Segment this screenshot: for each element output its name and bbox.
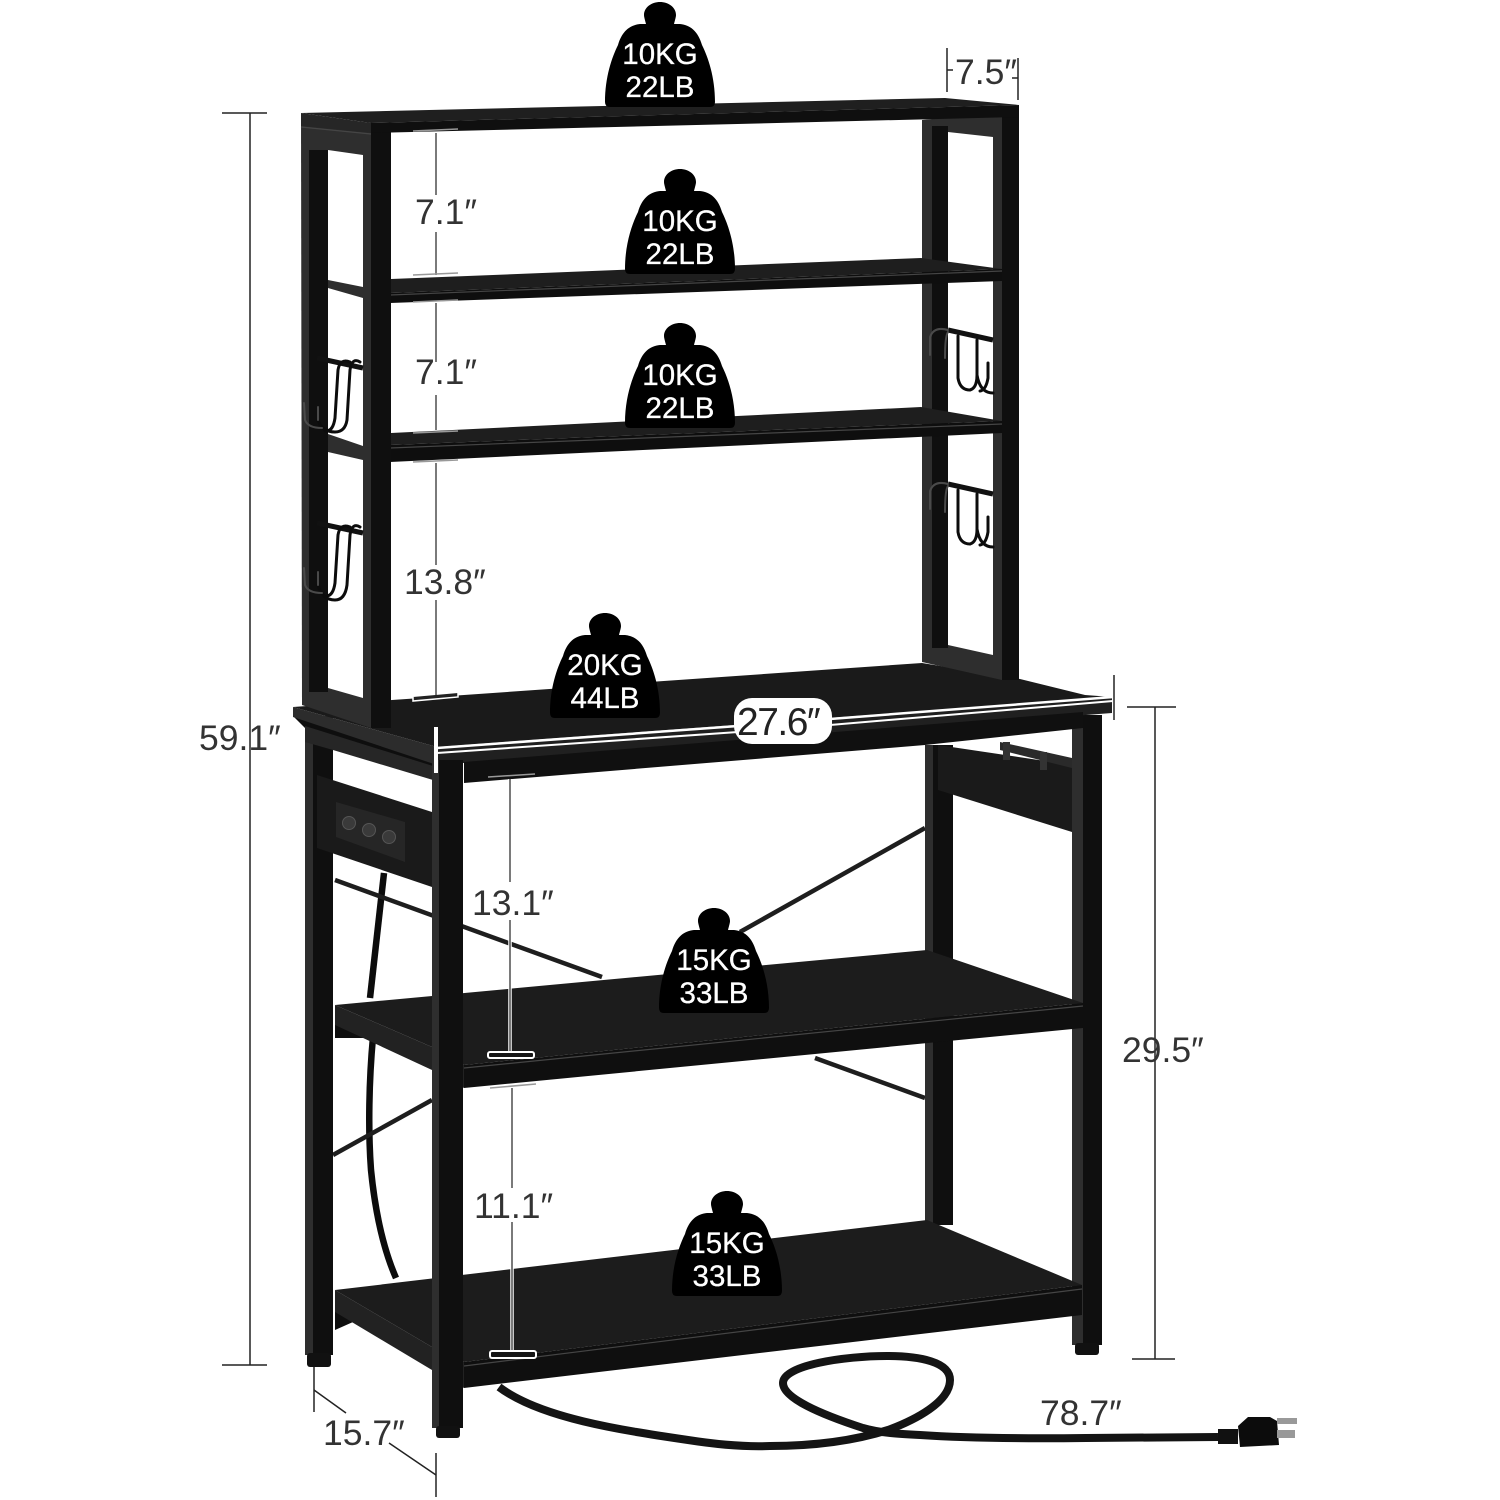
hooks upper right [930, 329, 993, 393]
label: 7.1 inches upper: 7.1″ [415, 192, 477, 232]
lower frame legs [293, 715, 1102, 1367]
weight: top shelf 10KG 22LB: 22LB [626, 71, 694, 104]
label: 78.7 inches: 78.7″ [1040, 1393, 1122, 1433]
label: 7.1 inches lower: 7.1″ [415, 352, 477, 392]
hutch shelf lower [328, 407, 1002, 462]
hooks lower right [930, 483, 993, 547]
weight: top shelf 10KG 22LB [605, 2, 715, 107]
middle shelf [335, 950, 1083, 1088]
dimension: desk width [436, 675, 1114, 773]
weight: shelf 10KG 22LB lower: 22LB [646, 392, 714, 425]
weight: top shelf 10KG 22LB: 10KG [622, 38, 698, 71]
power cable down the side [369, 873, 396, 1278]
dimension: middle gap [488, 774, 535, 1058]
dimension: upper shelf gap 1 [413, 129, 458, 275]
label: 29.5 inches: 29.5″ [1122, 1030, 1204, 1070]
hooks lower left [304, 523, 363, 600]
plug [1218, 1417, 1297, 1447]
cross braces [333, 828, 925, 1155]
dimension: overall height [222, 113, 267, 1365]
label: 13.1 inches: 13.1″ [472, 883, 554, 923]
label: 11.1 inches: 11.1″ [474, 1186, 553, 1226]
desktop [293, 663, 1112, 783]
dimension: bottom gap [490, 1084, 536, 1358]
weight: desktop 20KG 44LB: 44LB [571, 682, 639, 715]
weight: shelf 10KG 22LB [625, 169, 735, 274]
weight: desktop 20KG 44LB [550, 613, 660, 718]
bottom shelf [335, 1220, 1082, 1388]
weight: desktop 20KG 44LB: 20KG [567, 649, 643, 682]
right side panel with hooks [938, 742, 1072, 832]
dimension: hutch gap [413, 460, 458, 701]
weight: bottom shelf 15KG 33LB: 15KG [689, 1227, 765, 1260]
weight: middle shelf 15KG 33LB [659, 908, 769, 1013]
weight: bottom shelf 15KG 33LB: 33LB [693, 1260, 761, 1293]
power cord on floor with loop [499, 1356, 1218, 1446]
dimension: desk height [1127, 707, 1176, 1359]
weight: bottom shelf 15KG 33LB [672, 1191, 782, 1296]
hutch left frame [301, 115, 371, 728]
weight: shelf 10KG 22LB: 10KG [642, 205, 718, 238]
hooks upper left [304, 358, 363, 432]
weight: shelf 10KG 22LB lower [625, 323, 735, 428]
dimension: hutch depth [947, 48, 1018, 100]
weight: shelf 10KG 22LB lower: 10KG [642, 359, 718, 392]
hutch top shelf [301, 98, 1019, 134]
dimension: upper shelf gap 2 [413, 300, 458, 433]
weight: middle shelf 15KG 33LB: 33LB [680, 977, 748, 1010]
dimension: depth [314, 1367, 436, 1497]
hutch left front post [371, 123, 391, 728]
label: 13.8 inches: 13.8″ [404, 562, 486, 602]
label: 27.6 inches: 27.6″ [737, 701, 821, 744]
label: 15.7 inches: 15.7″ [323, 1413, 405, 1453]
weight: shelf 10KG 22LB: 22LB [646, 238, 714, 271]
hutch shelf upper [328, 258, 1002, 303]
label: 59.1 inches: 59.1″ [199, 718, 281, 758]
weight: middle shelf 15KG 33LB: 15KG [676, 944, 752, 977]
label: 7.5 inches: 7.5″ [955, 52, 1017, 92]
side panel with power outlet [317, 775, 432, 887]
front left leg [432, 760, 463, 1438]
hutch right frame [922, 112, 1019, 680]
